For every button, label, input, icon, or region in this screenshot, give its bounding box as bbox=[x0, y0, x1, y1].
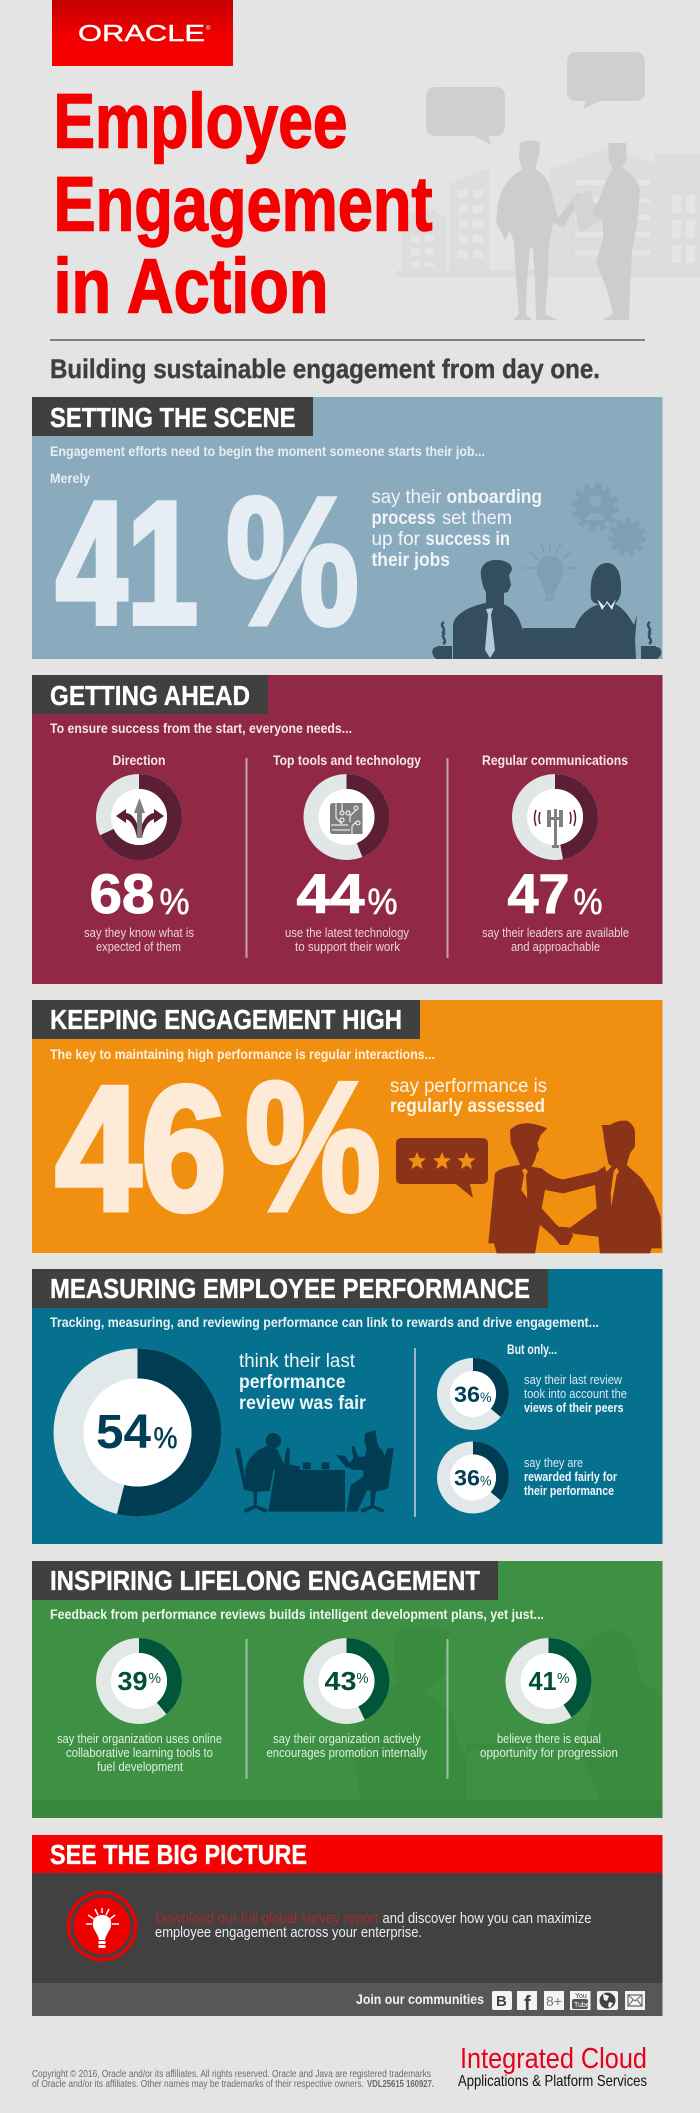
donut chart 39%: % bbox=[148, 1670, 161, 1687]
big stat 46%: 46 bbox=[56, 1050, 226, 1248]
title: in Action bbox=[54, 244, 328, 330]
section heading: MEASURING EMPLOYEE PERFORMANCE bbox=[50, 1273, 530, 1304]
stat 47% bbox=[508, 862, 602, 925]
stat description: their jobs bbox=[372, 550, 450, 571]
stat description: up for bbox=[372, 529, 421, 550]
description: use the latest technology bbox=[285, 925, 409, 940]
donut chart 43%: 43 bbox=[324, 1666, 356, 1696]
logo: Oracle red box: ® bbox=[206, 25, 211, 32]
description bbox=[266, 1731, 427, 1760]
logo: Oracle red box bbox=[52, 0, 233, 66]
illustration: man and woman at laptop bbox=[432, 560, 661, 659]
icon: facebook bbox=[517, 1991, 537, 2015]
description: collaborative learning tools to bbox=[66, 1745, 213, 1760]
big stat 46%: % bbox=[245, 1043, 381, 1249]
donut chart 54% bbox=[54, 1348, 222, 1516]
description: say they know what is bbox=[84, 925, 194, 940]
stat description: review was fair bbox=[239, 1393, 367, 1414]
icon: light bulb bbox=[524, 543, 578, 601]
intro text: Engagement efforts need to begin the moment someone starts their job... bbox=[50, 443, 485, 459]
donut chart 36% peers: 36 bbox=[454, 1382, 480, 1407]
description: believe there is equal bbox=[497, 1731, 601, 1746]
column: equal opportunity bbox=[480, 1638, 618, 1760]
footer copyright: of Oracle and/or its affiliates. Other names may be trademarks of their respective owners. bbox=[32, 2079, 364, 2090]
description bbox=[57, 1731, 222, 1774]
illustration: two men shaking hands bbox=[488, 1121, 662, 1253]
stat description: performance bbox=[239, 1372, 346, 1393]
logo: Oracle red box: ORACLE bbox=[78, 20, 205, 46]
donut chart 36% peers: % bbox=[480, 1389, 492, 1405]
donut chart 68% bbox=[96, 774, 182, 860]
donut chart 41% bbox=[506, 1638, 592, 1724]
icon: youtube bbox=[570, 1991, 590, 2010]
background silhouettes bbox=[353, 1626, 662, 1800]
social links bbox=[356, 1991, 645, 2015]
speech bubble left bbox=[426, 87, 505, 145]
footer copyright: Copyright © 2016, Oracle and/or its affiliates. All rights reserved. Oracle and Java are registered trademarks bbox=[32, 2069, 431, 2080]
stat 44% bbox=[296, 862, 398, 925]
donut chart 39%: 39 bbox=[118, 1666, 148, 1696]
but only label: But only... bbox=[507, 1341, 557, 1357]
illustration: performance review meeting bbox=[235, 1430, 394, 1512]
big stat 46% bbox=[56, 1043, 381, 1249]
donut chart 36% rewards bbox=[437, 1442, 509, 1514]
buildings skyline bbox=[397, 147, 700, 277]
stat 68%: % bbox=[160, 881, 190, 922]
description: rewards: their performance bbox=[524, 1483, 614, 1498]
panel: getting ahead bbox=[32, 675, 662, 984]
man left bbox=[496, 140, 582, 320]
stat description: regularly assessed bbox=[390, 1096, 545, 1117]
section heading bbox=[32, 397, 313, 436]
footer copyright: VDL25615 160927. bbox=[367, 2079, 434, 2090]
call to action text: and discover how you can maximize bbox=[382, 1911, 592, 1927]
subtitle: Building sustainable engagement from day one. bbox=[50, 354, 600, 384]
speech bubble right bbox=[567, 52, 645, 109]
donut chart 47% bbox=[512, 774, 598, 860]
icon: speech bubble with stars bbox=[396, 1138, 488, 1198]
big stat 41%: % bbox=[226, 459, 359, 663]
description: say their organization actively bbox=[273, 1731, 421, 1746]
section heading: GETTING AHEAD bbox=[50, 680, 250, 711]
description: and approachable bbox=[511, 939, 600, 954]
title: Employee bbox=[54, 78, 348, 164]
big stat 41% bbox=[56, 459, 359, 663]
column: tools and technology bbox=[273, 752, 421, 954]
big stat 41%: 41 bbox=[56, 465, 198, 660]
icon: youtube: You bbox=[575, 1993, 587, 2000]
description: rewards: rewarded fairly for bbox=[524, 1469, 617, 1484]
section heading bbox=[32, 1835, 662, 1873]
description bbox=[84, 925, 194, 954]
title bbox=[54, 78, 432, 330]
description: opportunity for progression bbox=[480, 1745, 618, 1760]
stat 44%: 44 bbox=[296, 862, 364, 925]
merely label: Merely bbox=[50, 470, 90, 486]
stat description bbox=[372, 487, 542, 571]
stat description: think their last bbox=[239, 1351, 356, 1372]
description: expected of them bbox=[96, 939, 181, 954]
section heading bbox=[32, 1269, 548, 1308]
stat 68% bbox=[90, 862, 190, 925]
icon: gears bbox=[574, 486, 644, 554]
column: regular communications bbox=[482, 752, 629, 954]
section heading: SETTING THE SCENE bbox=[50, 402, 296, 433]
description: peers: views of their peers bbox=[524, 1400, 624, 1415]
donut chart 36% rewards: 36 bbox=[454, 1466, 480, 1490]
description: say their organization uses online bbox=[57, 1731, 222, 1746]
section heading: INSPIRING LIFELONG ENGAGEMENT bbox=[50, 1565, 480, 1596]
stat 44%: % bbox=[368, 881, 398, 922]
column: regular communications: Regular communications bbox=[482, 752, 628, 768]
icon: google plus bbox=[544, 1991, 564, 2010]
icon: google plus: 8+ bbox=[546, 1993, 562, 2009]
donut chart 54%: % bbox=[154, 1422, 178, 1455]
intro text: The key to maintaining high performance is regular interactions... bbox=[50, 1046, 435, 1062]
stat description: say their bbox=[372, 487, 442, 508]
icon: mail bbox=[625, 1991, 645, 2010]
integrated cloud wordmark bbox=[458, 2043, 647, 2090]
donut chart 43%: % bbox=[356, 1670, 368, 1687]
stat description: onboarding bbox=[446, 487, 542, 508]
stat description bbox=[390, 1076, 547, 1117]
panel: see the big picture bbox=[32, 1835, 662, 2016]
column: online learning bbox=[57, 1638, 222, 1774]
description: peers bbox=[524, 1372, 627, 1415]
donut chart 54%: 54 bbox=[96, 1406, 151, 1459]
stat description: say performance is bbox=[390, 1076, 547, 1097]
icon: globe bbox=[597, 1991, 618, 2010]
description: to support their work bbox=[295, 939, 400, 954]
column: tools and technology: Top tools and technology bbox=[273, 752, 421, 768]
stat description bbox=[239, 1351, 367, 1414]
stat description: success in bbox=[426, 529, 510, 550]
description: fuel development bbox=[97, 1759, 183, 1774]
call to action text: Download our full global survey report bbox=[155, 1911, 378, 1927]
intro text: Tracking, measuring, and reviewing performance can link to rewards and drive engagement... bbox=[50, 1314, 599, 1330]
section heading: SEE THE BIG PICTURE bbox=[50, 1839, 307, 1870]
description: say their leaders are available bbox=[482, 925, 629, 940]
social links: Join our communities bbox=[356, 1991, 484, 2007]
section heading: KEEPING ENGAGEMENT HIGH bbox=[50, 1004, 402, 1035]
description bbox=[285, 925, 409, 954]
donut chart 43% bbox=[304, 1638, 390, 1724]
stat 68%: 68 bbox=[90, 862, 154, 925]
donut chart 41%: 41 bbox=[528, 1666, 556, 1696]
donut chart 41%: % bbox=[557, 1670, 570, 1687]
title: Engagement bbox=[54, 162, 432, 248]
description: encourages promotion internally bbox=[266, 1745, 427, 1760]
icon: blog bbox=[492, 1991, 512, 2010]
column: direction bbox=[84, 752, 194, 954]
panel: measuring employee performance bbox=[32, 1269, 662, 1544]
panel: setting the scene bbox=[32, 397, 662, 663]
document held between men bbox=[572, 190, 600, 232]
stat 47%: % bbox=[574, 881, 602, 922]
description bbox=[480, 1731, 618, 1760]
panel: keeping engagement high bbox=[32, 1000, 662, 1253]
description bbox=[482, 925, 629, 954]
stat description: process bbox=[372, 508, 436, 529]
donut chart 39% bbox=[96, 1638, 182, 1724]
panel: inspiring lifelong engagement bbox=[32, 1561, 662, 1818]
section heading bbox=[32, 1000, 420, 1039]
icon: facebook: f bbox=[524, 1993, 531, 2015]
column: promotion bbox=[266, 1638, 427, 1760]
call to action text: employee engagement across your enterprise. bbox=[155, 1925, 422, 1941]
icon: blog: B bbox=[496, 1993, 507, 2010]
donut chart 36% peers bbox=[437, 1358, 509, 1430]
stat 47%: 47 bbox=[508, 862, 570, 925]
icon: youtube: Tube bbox=[574, 2002, 590, 2009]
stat description: set them bbox=[442, 508, 512, 529]
description: peers: took into account the bbox=[524, 1386, 627, 1401]
call to action text bbox=[155, 1911, 592, 1941]
man right bbox=[592, 143, 640, 320]
description: rewards bbox=[524, 1455, 617, 1498]
footer copyright bbox=[32, 2069, 434, 2090]
column: direction: Direction bbox=[112, 752, 166, 768]
intro text: To ensure success from the start, everyone needs... bbox=[50, 720, 352, 736]
icon: light bulb in red circle bbox=[68, 1892, 136, 1960]
donut chart 44% bbox=[304, 774, 390, 860]
donut chart 36% rewards: % bbox=[480, 1472, 492, 1488]
integrated cloud wordmark: Integrated Cloud bbox=[460, 2043, 647, 2075]
integrated cloud wordmark: Applications & Platform Services bbox=[458, 2073, 647, 2090]
description: rewards: say they are bbox=[524, 1455, 583, 1470]
header illustration: skyline, two men and speech bubbles bbox=[397, 52, 700, 320]
intro text: Feedback from performance reviews builds intelligent development plans, yet just... bbox=[50, 1606, 544, 1622]
description: peers: say their last review bbox=[524, 1372, 623, 1387]
